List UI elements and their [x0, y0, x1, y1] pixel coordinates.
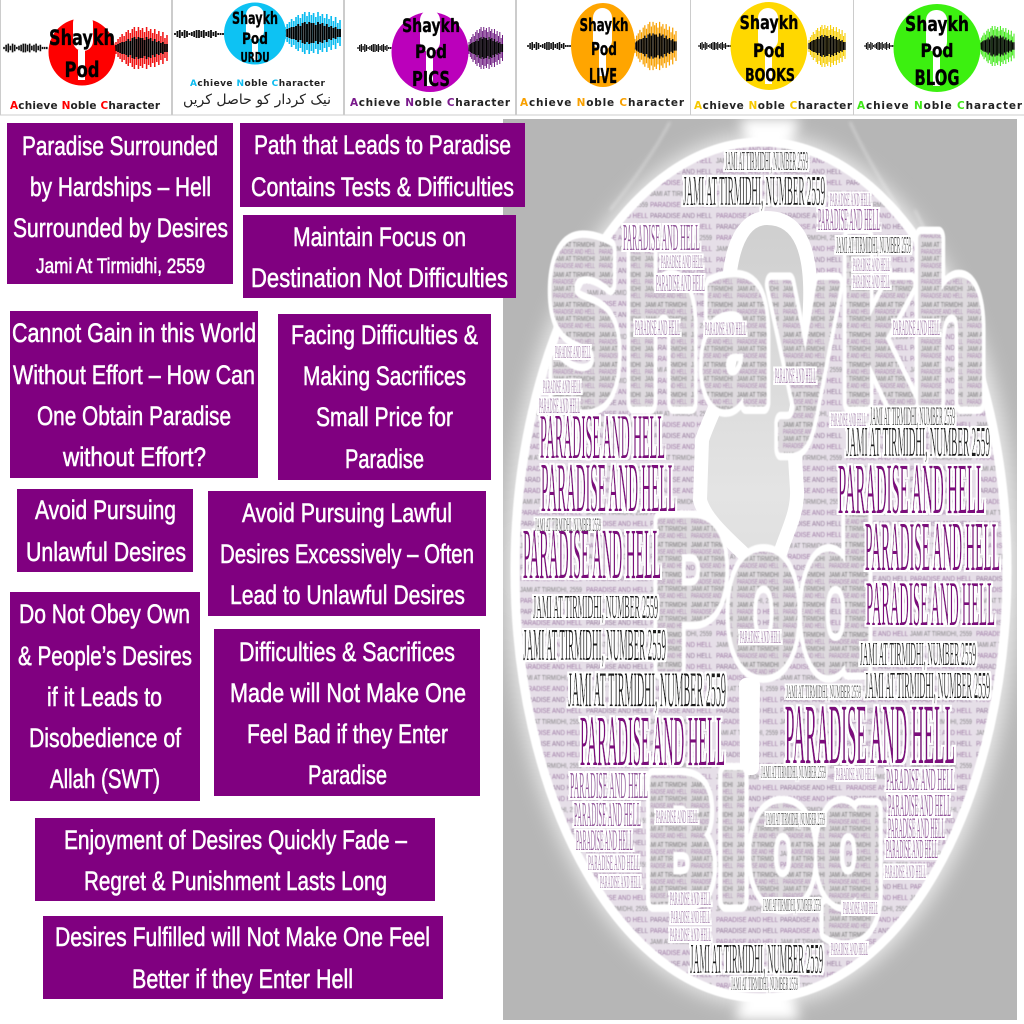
- panel: Path that Leads to Paradise: Contains Tests & Difficulties: [251, 172, 514, 202]
- word cloud phrases: PARADISE AND HELL: [543, 377, 581, 398]
- panel: Desires Fulfilled: Desires Fulfilled will Not Make One Feel: [55, 922, 430, 952]
- panel: Facing Difficulties: [278, 314, 491, 480]
- logo: Shaykh Pod Books: [690, 0, 854, 115]
- word cloud phrases: PARADISE AND HELL: [705, 319, 746, 340]
- word cloud phrases: PARADISE AND HELL: [670, 889, 711, 910]
- logo: Shaykh Pod Urdu: نیک کردار کو حاصل کریں: [183, 92, 331, 108]
- logo: Shaykh Pod Pics: [344, 0, 516, 115]
- word cloud phrases: PARADISE AND HELL: [574, 795, 641, 834]
- logo: Shaykh Pod Blog: Shaykh: [905, 12, 969, 36]
- word cloud phrases: PARADISE AND HELL: [670, 925, 711, 946]
- panel: Paradise Surrounded by Hardships: Jami At Tirmidhi, 2559: [36, 255, 205, 278]
- panel: Cannot Gain Without Effort: Without Effort – How Can: [13, 360, 255, 390]
- logo: Shaykh Pod Urdu: URDU: [240, 51, 270, 66]
- word cloud phrases: PARADISE AND HELL: [740, 627, 781, 647]
- logo: Shaykh Pod Live: LIVE: [589, 64, 617, 88]
- panel: Difficulties and Sacrifices: Difficulties & Sacrifices: [239, 637, 455, 667]
- panel: Do Not Obey Desires: Do Not Obey Own: [19, 599, 190, 629]
- panel: Desires Fulfilled: Better if they Enter Hell: [132, 964, 353, 994]
- panel: Paradise Surrounded by Hardships: Paradise Surrounded: [22, 131, 218, 161]
- word cloud phrases: PARADISE AND HELL: [661, 252, 703, 273]
- logo: Shaykh Pod Live: Achieve Noble Character: [520, 97, 685, 109]
- logo: Shaykh Pod Urdu: Pod: [242, 29, 268, 48]
- panel: Difficulties and Sacrifices: [214, 629, 480, 796]
- logo: Shaykh Pod Blog: [854, 0, 1024, 115]
- panel: Cannot Gain Without Effort: One Obtain Paradise: [37, 401, 231, 431]
- logo: Shaykh Pod: Pod: [64, 58, 100, 82]
- word cloud phrases: PARADISE AND HELL: [843, 898, 878, 918]
- panel: Maintain Focus: Maintain Focus on: [293, 222, 466, 252]
- panel: Paradise Surrounded by Hardships: [7, 123, 233, 284]
- panel: Do Not Obey Desires: if it Leads to: [47, 682, 162, 712]
- panel: Path that Leads to Paradise: [240, 123, 525, 207]
- panel: Difficulties and Sacrifices: Made will Not Make One: [230, 678, 466, 708]
- panel: Do Not Obey Desires: & People’s Desires: [18, 641, 192, 671]
- logo: Shaykh Pod Live: Shaykh: [580, 15, 628, 36]
- logo: Shaykh Pod Blog: Achieve Noble Character: [857, 100, 1023, 112]
- panel: Cannot Gain Without Effort: [10, 311, 258, 478]
- logo: Shaykh Pod Books: Achieve Noble Character: [694, 100, 853, 112]
- logo: Shaykh Pod Live: [516, 0, 690, 115]
- panel: Avoid Lawful Desires Excessively: Lead to Unlawful Desires: [230, 580, 465, 610]
- word cloud phrases: PARADISE AND HELL: [656, 807, 698, 828]
- logo: Shaykh Pod Pics: Pod: [415, 41, 447, 63]
- word cloud phrases: PARADISE AND HELL: [555, 342, 591, 362]
- word cloud phrases: PARADISE AND HELL: [671, 907, 710, 927]
- word cloud phrases: PARADISE AND HELL: [600, 872, 641, 892]
- panel: Enjoyment of Desires: Regret & Punishment Lasts Long: [84, 866, 387, 896]
- logo: Shaykh Pod Urdu: Shaykh: [232, 9, 278, 29]
- panel: Enjoyment of Desires: [35, 818, 435, 901]
- word cloud phrases: PARADISE AND HELL: [830, 190, 871, 211]
- word cloud phrases: PARADISE AND HELL: [656, 271, 705, 297]
- panel: Paradise Surrounded by Hardships: Surrounded by Desires: [13, 213, 228, 243]
- panel: Do Not Obey Desires: [10, 592, 200, 801]
- word cloud phrases: JAMI AT TIRMIDHI, NUMBER 2559: [731, 974, 798, 995]
- panel: Cannot Gain Without Effort: without Effort?: [62, 442, 206, 472]
- panel: Cannot Gain Without Effort: Cannot Gain in this World: [12, 318, 256, 348]
- panel: Do Not Obey Desires: Allah (SWT): [50, 764, 160, 794]
- logo: Shaykh Pod: Shaykh: [49, 26, 115, 50]
- logo: Shaykh Pod Urdu: [172, 0, 344, 115]
- word cloud phrases: PARADISE AND HELL: [570, 765, 648, 807]
- panel: Facing Difficulties: Facing Difficulties &: [291, 320, 478, 350]
- logo: Shaykh Pod Urdu: Achieve Noble Character: [190, 79, 326, 89]
- panel: Avoid Unlawful Desires: Unlawful Desires: [26, 537, 186, 567]
- panel: Avoid Unlawful Desires: [17, 489, 193, 572]
- panel: Paradise Surrounded by Hardships: by Hardships – Hell: [30, 172, 211, 202]
- panel: Facing Difficulties: Small Price for: [316, 402, 453, 432]
- logo: Shaykh Pod: [0, 0, 172, 115]
- panel: Desires Fulfilled: [43, 916, 443, 999]
- logo: Shaykh Pod Books: Shaykh: [740, 12, 798, 34]
- panel: Difficulties and Sacrifices: Feel Bad if they Enter: [247, 719, 448, 749]
- panel: Path that Leads to Paradise: Path that Leads to Paradise: [254, 130, 511, 160]
- panel: Maintain Focus: Destination Not Difficulties: [251, 263, 508, 293]
- panel: Maintain Focus: [243, 215, 516, 298]
- panel: Enjoyment of Desires: Enjoyment of Desires Quickly Fade –: [64, 825, 407, 855]
- background word: Shaykh: [546, 202, 988, 939]
- logo: Shaykh Pod Books: BOOKS: [745, 65, 795, 86]
- logo: Shaykh Pod Live: Pod: [591, 39, 617, 60]
- word cloud phrases: PARADISE AND HELL: [775, 363, 816, 388]
- panel: Avoid Unlawful Desires: Avoid Pursuing: [35, 495, 176, 525]
- icon: microphone silhouette: [700, 218, 810, 768]
- panel: Do Not Obey Desires: Disobedience of: [29, 723, 181, 753]
- word cloud phrases: PARADISE AND HELL: [831, 410, 866, 431]
- word cloud phrases: PARADISE AND HELL: [539, 393, 580, 418]
- word cloud phrases: [523, 146, 1000, 995]
- panel: Facing Difficulties: Paradise: [345, 444, 424, 474]
- word cloud phrases: PARADISE AND HELL: [623, 217, 700, 259]
- logo: Shaykh Pod Blog: Pod: [920, 40, 954, 62]
- panel: Avoid Lawful Desires Excessively: Avoid Pursuing Lawful: [242, 498, 452, 528]
- logo: Shaykh Pod Pics: Shaykh: [402, 15, 460, 37]
- panel: Difficulties and Sacrifices: Paradise: [308, 760, 387, 790]
- panel: Facing Difficulties: Making Sacrifices: [303, 361, 466, 391]
- word cloud phrases: PARADISE AND HELL: [588, 850, 640, 875]
- logo: Shaykh Pod Books: Pod: [753, 40, 785, 62]
- word cloud phrases: PARADISE AND HELL: [831, 939, 868, 959]
- logo: Shaykh Pod Pics: PICS: [412, 67, 450, 91]
- logo: Shaykh Pod: Achieve Noble Character: [10, 100, 161, 112]
- logo: Shaykh Pod Pics: Achieve Noble Character: [350, 97, 511, 109]
- word cloud phrases: JAMI AT TIRMIDHI, NUMBER 2559: [535, 515, 601, 536]
- panel: Shaykh Pod Blog word cloud: [503, 119, 1018, 1020]
- panel: Avoid Lawful Desires Excessively: Desires Excessively – Often: [220, 539, 474, 569]
- panel: Avoid Lawful Desires Excessively: [208, 491, 486, 616]
- word cloud phrases: PARADISE AND HELL: [836, 764, 875, 784]
- logo: Shaykh Pod Blog: BLOG: [914, 66, 960, 90]
- word cloud phrases: PARADISE AND HELL: [576, 824, 633, 857]
- word cloud phrases: PARADISE AND HELL: [635, 315, 680, 340]
